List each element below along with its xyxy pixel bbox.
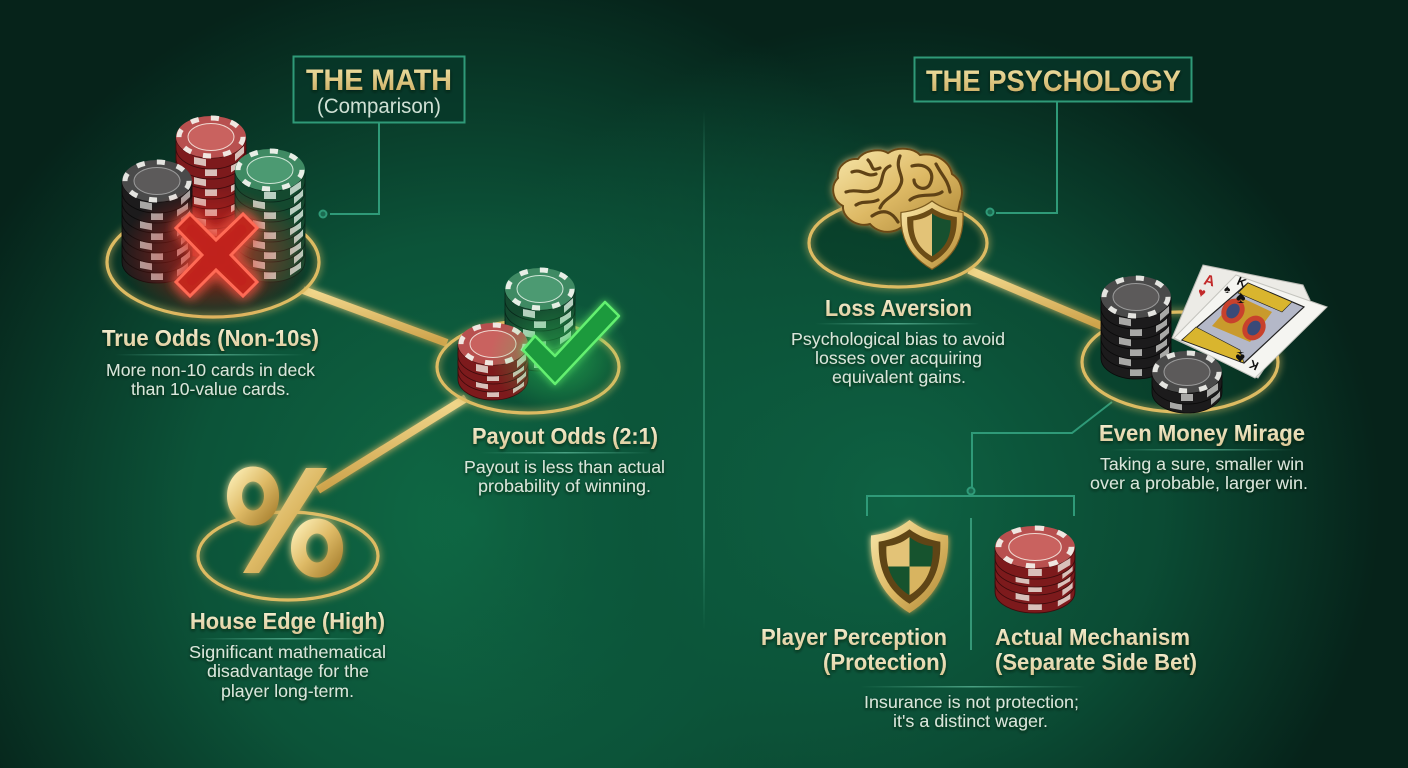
arrow: loss aversion to even money	[969, 270, 1102, 326]
ring: house edge	[198, 512, 378, 600]
label: player perception: Player Perception	[761, 624, 947, 650]
arrow: payout odds to house edge	[318, 398, 466, 490]
label: even money mirage: Even Money Mirage	[1099, 420, 1305, 446]
label: loss aversion: losses over acquiring	[815, 348, 982, 368]
label: loss aversion: Loss Aversion	[825, 295, 972, 321]
label: house edge: Significant mathematical	[189, 642, 386, 662]
back card: ace of hearts: A	[1202, 271, 1217, 291]
label: loss aversion: Psychological bias to avoid	[791, 329, 1005, 349]
ring: true odds	[107, 207, 319, 317]
label: payout odds: probability of winning.	[478, 476, 651, 496]
label: house edge: House Edge (High)	[190, 608, 385, 634]
front card: king of spades: ♠	[1236, 287, 1246, 307]
connector: even money to split	[867, 402, 1112, 650]
connector: math title to true odds	[320, 123, 379, 218]
back card: ace of hearts: ♥	[1196, 284, 1208, 301]
ring: even money	[1082, 312, 1278, 412]
label: even money mirage: over a probable, larger win.	[1090, 473, 1308, 493]
icon: black chip stack	[122, 160, 192, 283]
icon: playing cards	[1172, 265, 1327, 378]
label: house edge	[189, 608, 386, 701]
sub-node: player perception	[761, 520, 948, 675]
icon: red chip stack	[995, 526, 1075, 613]
title box: the math: (Comparison)	[317, 95, 441, 118]
label: payout odds: Payout is less than actual	[464, 457, 665, 477]
node: payout odds	[437, 268, 665, 496]
arrow: true odds to payout odds	[303, 290, 447, 343]
connector: psychology title to loss aversion	[986, 102, 1057, 216]
icon: red neon X	[176, 214, 257, 296]
label: actual mechanism	[995, 624, 1197, 675]
title box: the psychology	[914, 58, 1192, 102]
icon: red chips	[458, 323, 528, 400]
label: true odds	[102, 325, 319, 399]
icon: gold percent sign	[234, 468, 336, 573]
label: true odds: True Odds (Non-10s)	[102, 325, 319, 351]
label: payout odds	[464, 423, 665, 496]
icon: black chip stack large	[1101, 276, 1171, 379]
title box: the math	[294, 56, 464, 122]
icon: quartered gold shield	[871, 520, 948, 613]
label: actual mechanism: (Separate Side Bet)	[995, 649, 1197, 675]
label: actual mechanism: Actual Mechanism	[995, 624, 1190, 650]
label: loss aversion: equivalent gains.	[832, 367, 966, 387]
sub-node: actual mechanism	[995, 526, 1197, 675]
back card: ace of hearts	[1172, 265, 1310, 378]
node: house edge	[189, 468, 386, 701]
node: true odds	[102, 116, 319, 399]
callout: insurance note: it's a distinct wager.	[893, 711, 1048, 731]
front card: king of spades: K	[1235, 274, 1249, 290]
icon: green check mark	[523, 302, 619, 384]
front card: king of spades: ♠	[1235, 348, 1245, 368]
label: house edge: player long-term.	[221, 681, 354, 701]
label: even money mirage	[1090, 420, 1308, 493]
label: true odds: than 10-value cards.	[131, 379, 290, 399]
callout: insurance note	[860, 686, 1085, 731]
panel: the math	[102, 56, 665, 701]
front card: king of spades: K	[1247, 357, 1261, 373]
icon: red chip stack	[176, 116, 246, 259]
icon: green chip stack	[235, 149, 305, 282]
title box: the psychology: THE PSYCHOLOGY	[926, 65, 1181, 98]
icon: black chip stack small	[1152, 351, 1222, 413]
icon: green chips	[505, 268, 575, 371]
panel: the psychology	[761, 58, 1327, 731]
icon: gold brain	[833, 149, 962, 232]
ring: payout odds	[437, 321, 619, 413]
ring: loss aversion	[809, 199, 987, 287]
label: payout odds: Payout Odds (2:1)	[472, 423, 658, 449]
label: true odds: More non-10 cards in deck	[106, 360, 315, 380]
front card: king of spades: ♠	[1224, 282, 1231, 296]
title box: the math: THE MATH	[306, 64, 452, 97]
callout: insurance note: Insurance is not protection;	[864, 692, 1079, 712]
icon: half shield	[901, 201, 963, 269]
node: loss aversion	[791, 149, 1005, 387]
centre divider	[703, 110, 705, 630]
label: player perception	[761, 624, 947, 675]
node: even money mirage	[1082, 265, 1327, 493]
label: player perception: (Protection)	[823, 649, 947, 675]
label: loss aversion	[791, 295, 1005, 387]
front card: king of spades	[1174, 274, 1327, 378]
label: even money mirage: Taking a sure, smaller win	[1100, 454, 1304, 474]
label: house edge: disadvantage for the	[207, 661, 369, 681]
